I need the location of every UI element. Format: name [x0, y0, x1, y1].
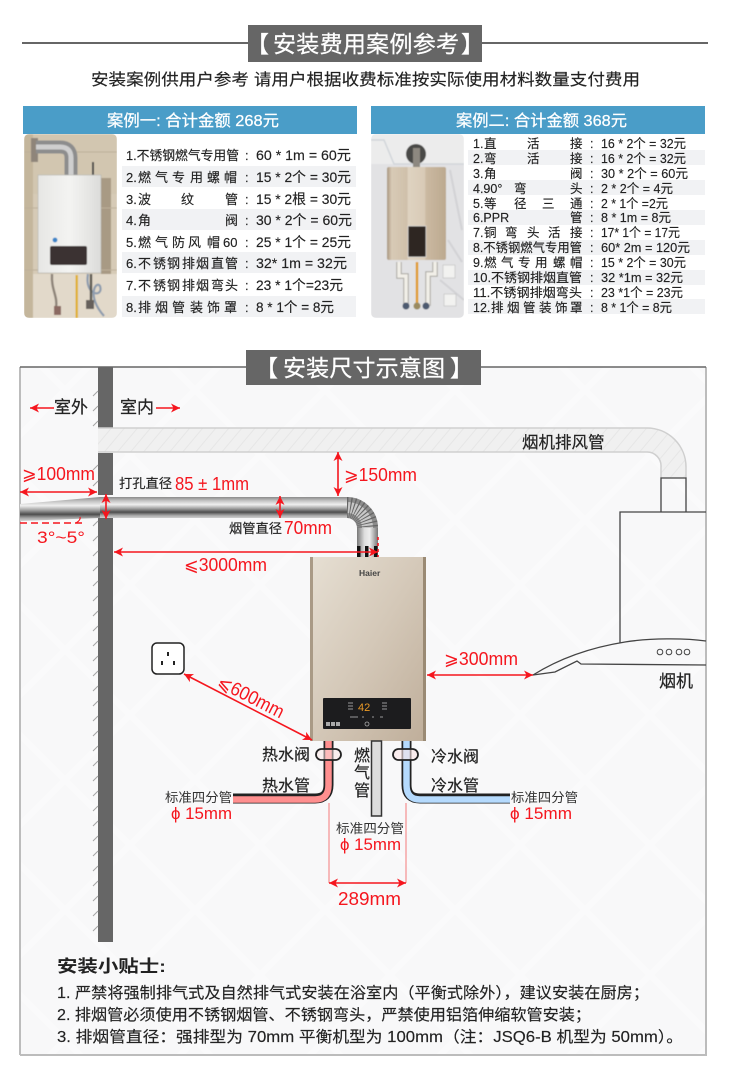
cost list: case one: 1.不锈钢燃气专用管: [126, 148, 239, 163]
photo: white water heater installed on tile wall: [24, 134, 117, 318]
section heading: installation cost cases: 安装费用案例参考: [273, 31, 459, 57]
pipe spec: hot water: [165, 790, 232, 823]
cost list: case one: :: [245, 213, 249, 228]
dimension: hole diameter: 打孔直径: [119, 476, 172, 491]
pipe spec: hot water: 标准四分管: [165, 790, 232, 805]
cost list: case two: 2 * 1个 =2元: [601, 196, 668, 211]
cost list: case two: 10.不锈钢排烟直管: [473, 270, 582, 285]
cost list: case two: :: [590, 211, 593, 225]
installation tips: 3. 排烟管直径：强排型为 70mm 平衡机型为 100mm（注：JSQ6-B 机型为 50mm）。: [57, 1028, 683, 1046]
cost list: case two: 8.不锈钢燃气专用管: [473, 240, 582, 255]
dimension: pipe spacing 289mm: 289mm: [338, 889, 401, 909]
cost list: case two: :: [590, 256, 593, 270]
dimension: flue diameter: 70mm: [284, 518, 332, 538]
cost list: case two: 23 *1个 = 23元: [601, 285, 683, 300]
cost list: case two: 11.不锈钢排烟弯头: [473, 285, 582, 300]
section heading: installation dimensions: 】: [450, 355, 473, 381]
cost list: case one: 5.: [126, 235, 137, 250]
cost list: case two: 30 * 2个 = 60元: [601, 166, 688, 181]
dimension: hole diameter: 85 ± 1mm: [175, 474, 249, 494]
control panel display: 42: [358, 702, 370, 714]
cost list: case two: 6.PPR: [473, 211, 509, 225]
cost list: case one: 8.: [126, 300, 137, 315]
cost list: case two: :: [590, 301, 593, 315]
cost list: case one: 7.: [126, 278, 137, 293]
cost list: case one: :: [245, 192, 249, 207]
pipe labels: 热水阀: [262, 746, 310, 764]
pipe labels: [262, 746, 479, 800]
cost list: case one: 23 * 1个=23元: [256, 277, 343, 293]
wall socket: [152, 643, 184, 674]
pipe labels: 热水管: [262, 777, 310, 795]
hot water valve: [316, 749, 341, 760]
cost list: case two: :: [590, 167, 593, 181]
pipe spec: cold water: 标准四分管: [511, 790, 578, 805]
dimension: flue diameter: [229, 496, 332, 538]
outdoor and indoor labels: [30, 398, 180, 417]
cost list: case one: 6.: [126, 256, 137, 271]
section heading: installation cost cases: [22, 25, 708, 62]
range hood exhaust duct: [98, 428, 686, 478]
cost list: case one: 燃气防风帽: [138, 235, 220, 250]
dimension: duct clearance 150mm: [338, 452, 417, 496]
dimension: wall clearance 100mm: [20, 464, 97, 492]
pipe spec: cold water: ϕ 15mm: [510, 804, 572, 823]
cold water valve: [393, 749, 418, 760]
cost list: case two: :: [590, 241, 593, 255]
cost list: case two: 16 * 2个 = 32元: [601, 151, 686, 166]
cost list: case one: :: [245, 278, 249, 293]
cost list: case two: :: [590, 137, 593, 151]
cost list: case two: :: [590, 152, 593, 166]
cost list: case one: [122, 147, 356, 317]
cost list: case two: 12.: [473, 301, 490, 315]
pipe labels: 燃: [354, 747, 370, 765]
cost list: case one: 60: [223, 235, 237, 250]
dimension: hood clearance 300mm: ⩾300mm: [444, 649, 518, 669]
installation tips: 安装小贴士:: [57, 957, 166, 976]
pipe spec: cold water: [510, 790, 578, 823]
range hood: 烟机: [659, 672, 693, 691]
dimension: flue diameter: 烟管直径: [229, 521, 282, 536]
cost list: case two: [468, 136, 705, 315]
cost list: case one: :: [245, 148, 249, 163]
case one header: 案例一: 合计金额 268元: [107, 112, 279, 130]
dimension: duct clearance 150mm: ⩾150mm: [344, 465, 417, 485]
wall: [93, 367, 113, 942]
pipe spec: hot water: ϕ 15mm: [171, 804, 232, 823]
cost list: case one: :: [245, 235, 249, 250]
range hood exhaust duct: 烟机排风管: [522, 433, 604, 452]
cost list: case two: :: [590, 226, 593, 240]
cost list: case two: 4.90°: [473, 182, 502, 196]
dimension: wall clearance 100mm: ⩾100mm: [22, 464, 95, 484]
cost list: case two: 直活接: [484, 136, 583, 151]
cost list: case one: 角阀: [138, 213, 238, 228]
hot water pipe: [233, 741, 341, 800]
dimension: hood clearance 300mm: [427, 649, 533, 675]
subtitle: 安装案例供用户参考 请用户根据收费标准按实际使用材料数量支付费用: [91, 71, 640, 89]
dimension: socket distance 600mm: ⩽600mm: [214, 672, 287, 723]
cost list: case one: 波纹管: [138, 192, 238, 207]
cost list: case two: 燃气专用螺帽: [484, 255, 583, 270]
pipe spec: gas: 标准四分管: [336, 821, 404, 836]
cost list: case two: 7.: [473, 226, 483, 240]
pipe spec: gas: [336, 821, 404, 854]
cost list: case two: 60* 2m = 120元: [601, 240, 690, 255]
cost list: case one: 2.: [126, 170, 137, 185]
cost list: case one: 排烟管装饰罩: [138, 300, 237, 315]
cost list: case two: :: [590, 286, 593, 300]
cost list: case two: 2.: [473, 152, 483, 166]
pipe labels: 管: [354, 782, 370, 800]
cost list: case two: 1.: [473, 137, 483, 151]
cost list: case two: 弯头: [514, 181, 583, 196]
cost list: case one: 32* 1m = 32元: [256, 255, 347, 271]
cost list: case two: :: [590, 271, 593, 285]
installation tips: 2. 排烟管必须使用不锈钢烟管、不锈钢弯头，严禁使用铝箔伸缩软管安装；: [57, 1006, 591, 1024]
cost list: case two: 排烟管装饰罩: [491, 300, 583, 315]
cost list: case one: 8 * 1个 = 8元: [256, 299, 334, 315]
cost list: case two: 铜弯头活接: [484, 225, 583, 240]
cost list: case two: 16 * 2个 = 32元: [601, 136, 686, 151]
pipe labels: 气: [354, 764, 370, 782]
cost list: case one: 15 * 2根 = 30元: [256, 191, 351, 207]
cost list: case one: 不锈钢排烟弯头: [138, 278, 238, 293]
cost list: case one: :: [245, 300, 249, 315]
cost list: case two: :: [590, 182, 593, 196]
water heater unit: [310, 557, 426, 741]
cost list: case two: 角阀: [484, 167, 583, 181]
gas pipe: [372, 741, 382, 816]
cost list: case two: 8 * 1m = 8元: [601, 210, 671, 225]
cost list: case one: 不锈钢排烟直管: [138, 256, 238, 271]
cost list: case two: :: [590, 197, 593, 211]
cost list: case two: 5.: [473, 197, 483, 211]
panel: case one: [23, 106, 357, 318]
cost list: case one: 15 * 2个 = 30元: [256, 169, 351, 185]
slope annotation: 3 to 5 degrees: [20, 517, 85, 547]
range hood: [533, 478, 706, 691]
section heading: installation cost cases: 】: [461, 31, 484, 57]
cost list: case two: 32 *1m = 32元: [601, 270, 683, 285]
section heading: installation dimensions: 安装尺寸示意图: [283, 355, 445, 381]
case one header: [23, 106, 357, 134]
cost list: case two: 9.: [473, 256, 483, 270]
slope annotation: 3 to 5 degrees: 3°~5°: [37, 528, 85, 547]
dimension: pipe spacing 289mm: [329, 803, 406, 909]
cost list: case two: 管: [570, 210, 583, 225]
case two header: 案例二: 合计金额 368元: [456, 112, 627, 130]
water heater unit: Haier: [359, 568, 381, 578]
cost list: case two: 2 * 2个 = 4元: [601, 181, 673, 196]
cost list: case one: 4.: [126, 213, 137, 228]
outdoor and indoor labels: 室内: [120, 398, 154, 417]
cost list: case one: 燃气专用螺帽: [138, 170, 237, 185]
cost list: case two: 15 * 2个 = 30元: [601, 255, 686, 270]
cost list: case one: :: [245, 256, 249, 271]
section heading: installation dimensions: 【: [255, 355, 278, 381]
cost list: case two: 弯活接: [484, 151, 583, 166]
cost list: case two: 17* 1个 = 17元: [601, 225, 680, 240]
installation tips: 1. 严禁将强制排气式及自然排气式安装在浴室内（平衡式除外），建议安装在厨房；: [57, 984, 649, 1002]
panel: case two: [371, 106, 705, 318]
case two header: [371, 106, 705, 134]
outdoor and indoor labels: 室外: [54, 398, 88, 417]
cost list: case two: 8 * 1个 = 8元: [601, 300, 672, 315]
section heading: installation cost cases: 【: [246, 31, 269, 57]
pipe labels: 冷水阀: [431, 748, 479, 766]
cost list: case two: 等径三通: [484, 196, 583, 211]
cost list: case one: 30 * 2个 = 60元: [256, 212, 352, 228]
cost list: case one: 25 * 1个 = 25元: [256, 234, 351, 250]
cold water pipe: [393, 741, 510, 800]
dimension: socket distance 600mm: [184, 672, 312, 740]
pipe labels: 冷水管: [431, 777, 479, 795]
installation tips: [57, 957, 683, 1046]
flue pipe with elbow: [20, 497, 378, 557]
control panel display: [323, 698, 411, 729]
cost list: case two: 3.: [473, 167, 483, 181]
panel: installation dimension diagram: [20, 350, 706, 1055]
pipe spec: gas: ϕ 15mm: [340, 835, 401, 854]
section heading: installation dimensions: [246, 350, 481, 385]
photo: gold water heater installed on marble wall: [371, 134, 464, 318]
cost list: case one: 60 * 1m = 60元: [256, 147, 351, 163]
cost list: case one: :: [245, 170, 249, 185]
cost list: case one: 3.: [126, 192, 137, 207]
dimension: flue run 3000mm: ⩽3000mm: [184, 555, 267, 575]
dimension: hole diameter: [106, 474, 249, 519]
